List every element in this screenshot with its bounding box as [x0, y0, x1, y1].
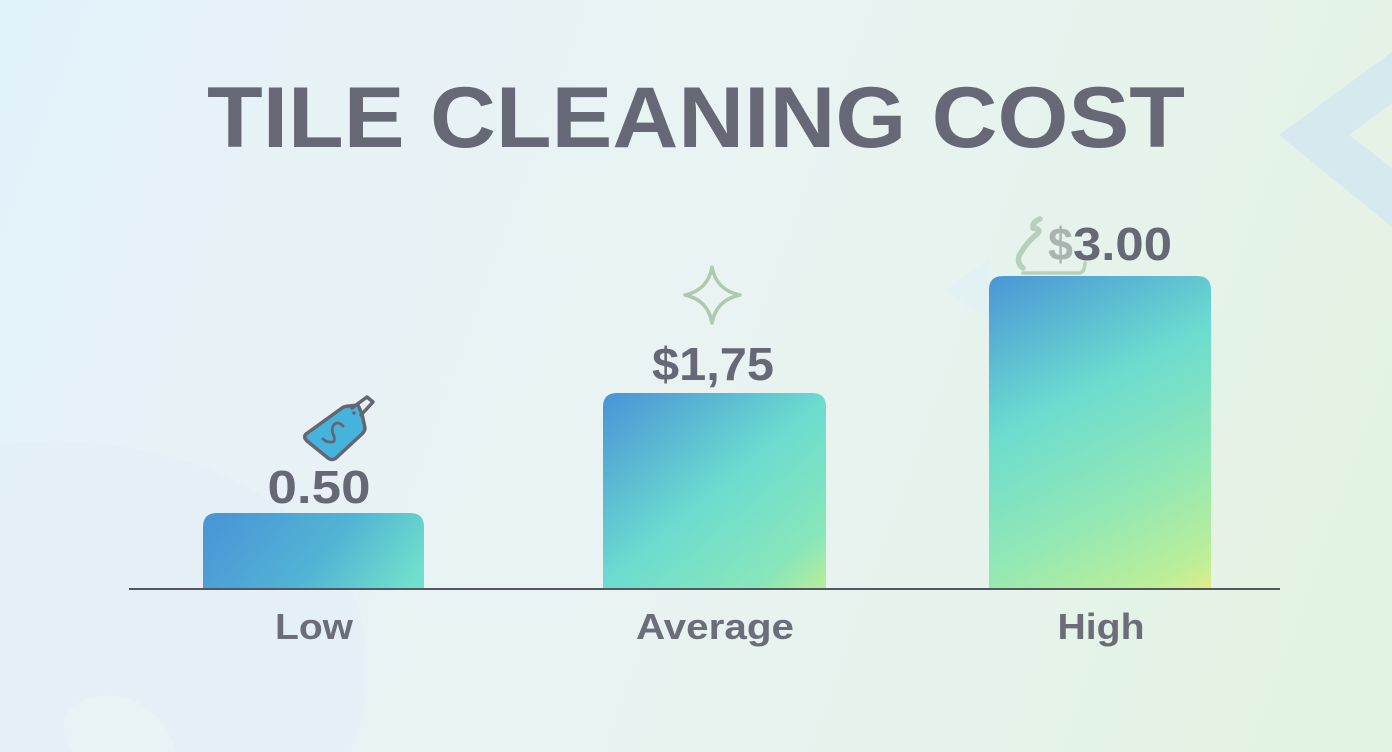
bar: high: [989, 276, 1211, 588]
icon: steam: [1018, 219, 1085, 273]
icon: price tag: [305, 397, 373, 460]
axis line: [129, 588, 1280, 590]
bar: average: [603, 393, 826, 588]
category label: high: High: [1058, 606, 1144, 647]
bar chart: [129, 218, 1280, 647]
icon: sparkle: [685, 267, 740, 323]
bar: low: [203, 513, 424, 588]
value: low: 0.50: [268, 461, 370, 513]
category label: average: Average: [636, 606, 794, 647]
value: average: $1,75: [652, 338, 774, 390]
value: high: $: [1048, 218, 1073, 270]
value: high: 3.00: [1073, 218, 1172, 270]
category label: low: Low: [275, 606, 354, 647]
title: TILE CLEANING COST: [207, 70, 1185, 166]
